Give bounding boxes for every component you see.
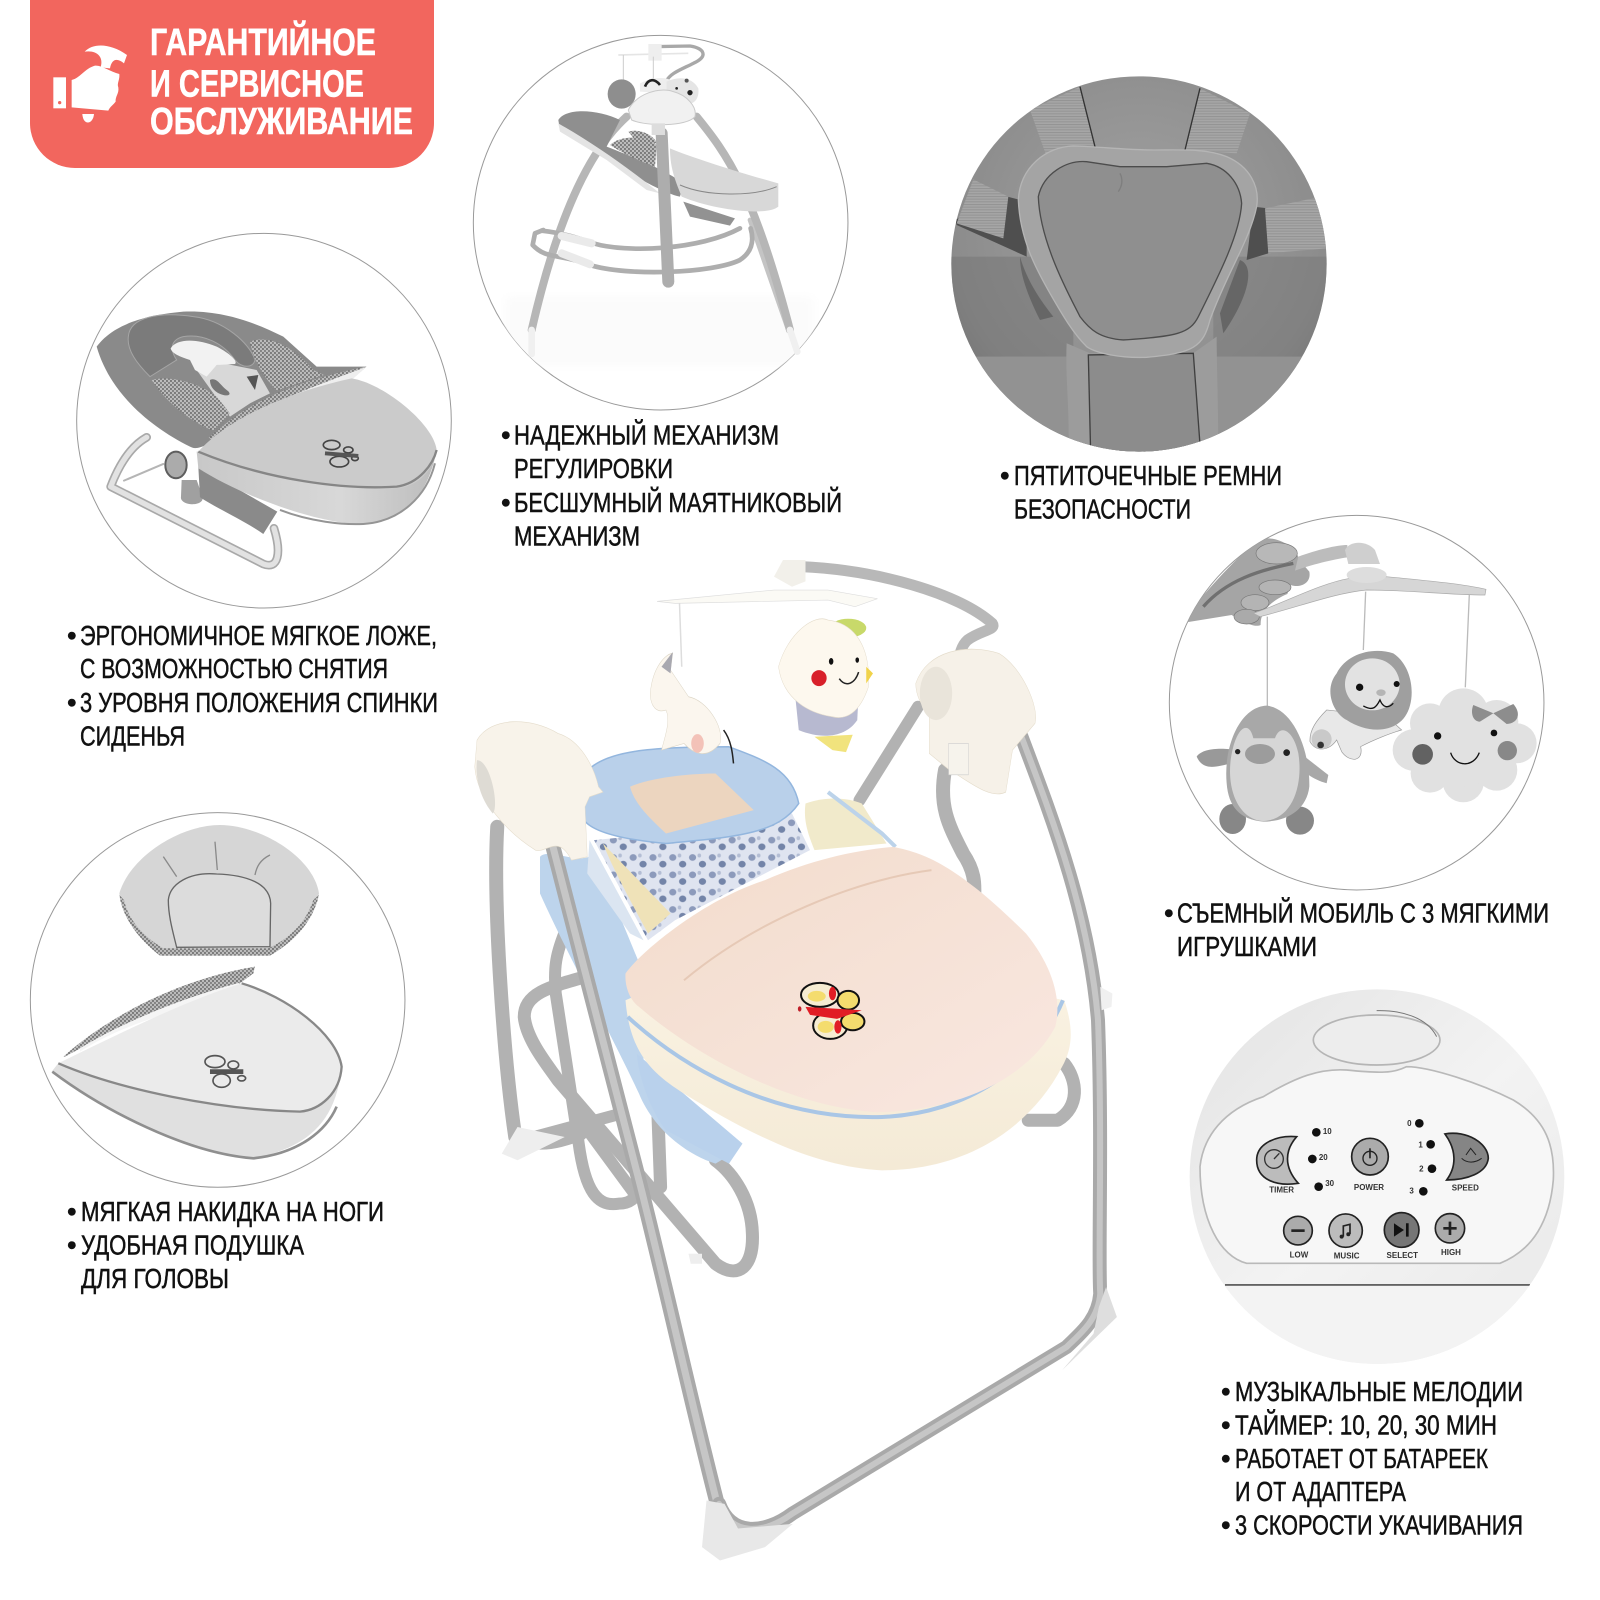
- circle: swing side view: [473, 35, 848, 410]
- mobile bar: [1253, 577, 1486, 617]
- main product: baby swing: [475, 560, 1117, 1561]
- speed indicators: [1407, 1119, 1436, 1196]
- text: mechanism features: •: [501, 487, 511, 518]
- patterned seat liner: [594, 813, 810, 940]
- head pad: [630, 773, 754, 833]
- head pad: [171, 341, 236, 377]
- text: cover and pillow features: МЯГКАЯ НАКИДКА НА НОГИ: [81, 1196, 384, 1227]
- low button: LOW: [1290, 1251, 1309, 1260]
- text: mechanism features: МЕХАНИЗМ: [514, 520, 640, 552]
- select button: [1384, 1213, 1419, 1260]
- toys: [608, 79, 636, 109]
- oval handle: [1313, 1015, 1440, 1065]
- text: mechanism features: БЕСШУМНЫЙ МАЯТНИКОВЫЙ: [514, 487, 842, 518]
- speed indicators: 2: [1419, 1164, 1424, 1173]
- seat base fabric: [540, 853, 738, 1164]
- penguin toy: [1197, 706, 1328, 835]
- floor feet: [1062, 1287, 1117, 1370]
- text: mechanism features: РЕГУЛИРОВКИ: [514, 453, 673, 484]
- speed button: [1445, 1133, 1488, 1193]
- foot cover: [63, 967, 255, 1057]
- text: seat features: 3 УРОВНЯ ПОЛОЖЕНИЯ СПИНКИ: [80, 687, 438, 718]
- mobile bar: [657, 590, 878, 607]
- seat shell: [97, 312, 367, 448]
- text: harness feature: БЕЗОПАСНОСТИ: [1014, 494, 1191, 524]
- text: controls features: РАБОТАЕТ ОТ БАТАРЕЕК: [1235, 1443, 1488, 1474]
- low button: [1284, 1216, 1312, 1260]
- lion toy: [1310, 651, 1412, 759]
- plush star toy: [778, 619, 873, 752]
- text: mechanism features: [501, 420, 842, 552]
- warranty badge: [30, 0, 434, 168]
- text: cover and pillow features: ДЛЯ ГОЛОВЫ: [81, 1263, 229, 1294]
- text: controls features: 3 СКОРОСТИ УКАЧИВАНИЯ: [1235, 1510, 1523, 1540]
- circle: removable seat bouncer: [77, 233, 451, 608]
- cloud toy: [1393, 688, 1537, 802]
- speed indicators: 1: [1418, 1140, 1423, 1149]
- seat: [558, 111, 683, 197]
- text: mechanism features: НАДЕЖНЫЙ МЕХАНИЗМ: [514, 420, 779, 450]
- button panel: [1200, 1067, 1553, 1263]
- swing legs: [532, 117, 797, 354]
- text: controls features: МУЗЫКАЛЬНЫЕ МЕЛОДИИ: [1235, 1376, 1523, 1407]
- music button: MUSIC: [1334, 1251, 1360, 1260]
- timer indicators: 10: [1323, 1127, 1332, 1136]
- text: cover and pillow features: [67, 1196, 384, 1294]
- text: mechanism features: •: [501, 420, 511, 450]
- text: controls features: •: [1221, 1443, 1231, 1474]
- text: seat features: •: [67, 687, 77, 718]
- select button: SELECT: [1387, 1251, 1418, 1260]
- text: controls features: ТАЙМЕР: 10, 20, 30 МИН: [1235, 1410, 1497, 1440]
- text: seat features: ЭРГОНОМИЧНОЕ МЯГКОЕ ЛОЖЕ,: [80, 620, 437, 651]
- high button: [1435, 1214, 1465, 1257]
- circle: head pillow and foot cover: [30, 813, 405, 1187]
- text: seat features: С ВОЗМОЖНОСТЬЮ СНЯТИЯ: [80, 653, 388, 684]
- text: seat features: •: [67, 620, 77, 651]
- text: mobile feature: [1164, 898, 1549, 962]
- mobile arm: [652, 46, 703, 82]
- badge text: [150, 19, 413, 143]
- top arm: [801, 567, 993, 747]
- front frame tubes: [551, 737, 1100, 1529]
- badge text: И СЕРВИСНОЕ: [150, 64, 364, 106]
- icon: hand with hammer: [53, 46, 127, 123]
- left motor housing: [475, 722, 603, 860]
- speed button: SPEED: [1452, 1184, 1479, 1193]
- high button: HIGH: [1441, 1248, 1461, 1257]
- text: controls features: [1221, 1376, 1523, 1540]
- rocker frame: [111, 437, 278, 565]
- centre post: [662, 133, 668, 282]
- hand holding arm: [1180, 538, 1310, 626]
- embroidered butterfly: [798, 983, 864, 1039]
- side straps: [955, 196, 1027, 257]
- text: cover and pillow features: •: [67, 1196, 77, 1227]
- text: mobile feature: •: [1164, 898, 1174, 928]
- embroidered butterfly: [323, 440, 358, 467]
- lower tongue: [1066, 337, 1218, 453]
- chest pad: [1018, 146, 1257, 357]
- badge text: ОБСЛУЖИВАНИЕ: [150, 101, 413, 143]
- speed indicators: 3: [1409, 1186, 1414, 1195]
- circle: five-point harness: [951, 76, 1327, 452]
- text: controls features: •: [1221, 1376, 1231, 1407]
- music button: [1329, 1214, 1362, 1260]
- cream seat base: [626, 940, 1071, 1170]
- plush cat toy: [650, 652, 734, 763]
- top controller: [628, 90, 695, 125]
- shoulder straps: [1030, 87, 1095, 157]
- power button: POWER: [1354, 1183, 1384, 1192]
- speed indicators: 0: [1407, 1119, 1412, 1128]
- circle: removable mobile with toys: [1169, 515, 1544, 890]
- head cushion: [128, 315, 255, 377]
- rear frame tubes: [496, 707, 1074, 1271]
- embroidered butterfly: [205, 1056, 246, 1087]
- head pillow: [119, 825, 319, 956]
- text: seat features: [67, 620, 438, 752]
- foot muff: [670, 148, 778, 211]
- patterned side pads: [152, 379, 230, 431]
- text: controls features: •: [1221, 1510, 1231, 1540]
- power button: [1352, 1138, 1388, 1192]
- timer button: TIMER: [1269, 1185, 1294, 1194]
- text: controls features: •: [1221, 1410, 1231, 1440]
- text: harness feature: ПЯТИТОЧЕЧНЫЕ РЕМНИ: [1014, 460, 1282, 491]
- side knob: [165, 452, 187, 478]
- text: cover and pillow features: •: [67, 1230, 77, 1260]
- text: cover and pillow features: УДОБНАЯ ПОДУШКА: [81, 1230, 305, 1260]
- blue headrest: [584, 747, 799, 843]
- text: harness feature: [1000, 460, 1282, 524]
- foot muff: [197, 450, 437, 525]
- text: seat features: СИДЕНЬЯ: [80, 720, 185, 752]
- timer indicators: [1308, 1127, 1335, 1191]
- text: mobile feature: ИГРУШКАМИ: [1177, 931, 1317, 962]
- text: harness feature: •: [1000, 460, 1010, 491]
- text: controls features: И ОТ АДАПТЕРА: [1235, 1476, 1407, 1507]
- circle: control panel: [1190, 990, 1564, 1364]
- timer indicators: 20: [1319, 1153, 1328, 1162]
- timer indicators: 30: [1325, 1179, 1335, 1188]
- foot muff: [625, 847, 1057, 1112]
- timer button: [1257, 1136, 1298, 1194]
- right motor housing: [916, 649, 1036, 794]
- badge text: ГАРАНТИЙНОЕ: [150, 19, 376, 64]
